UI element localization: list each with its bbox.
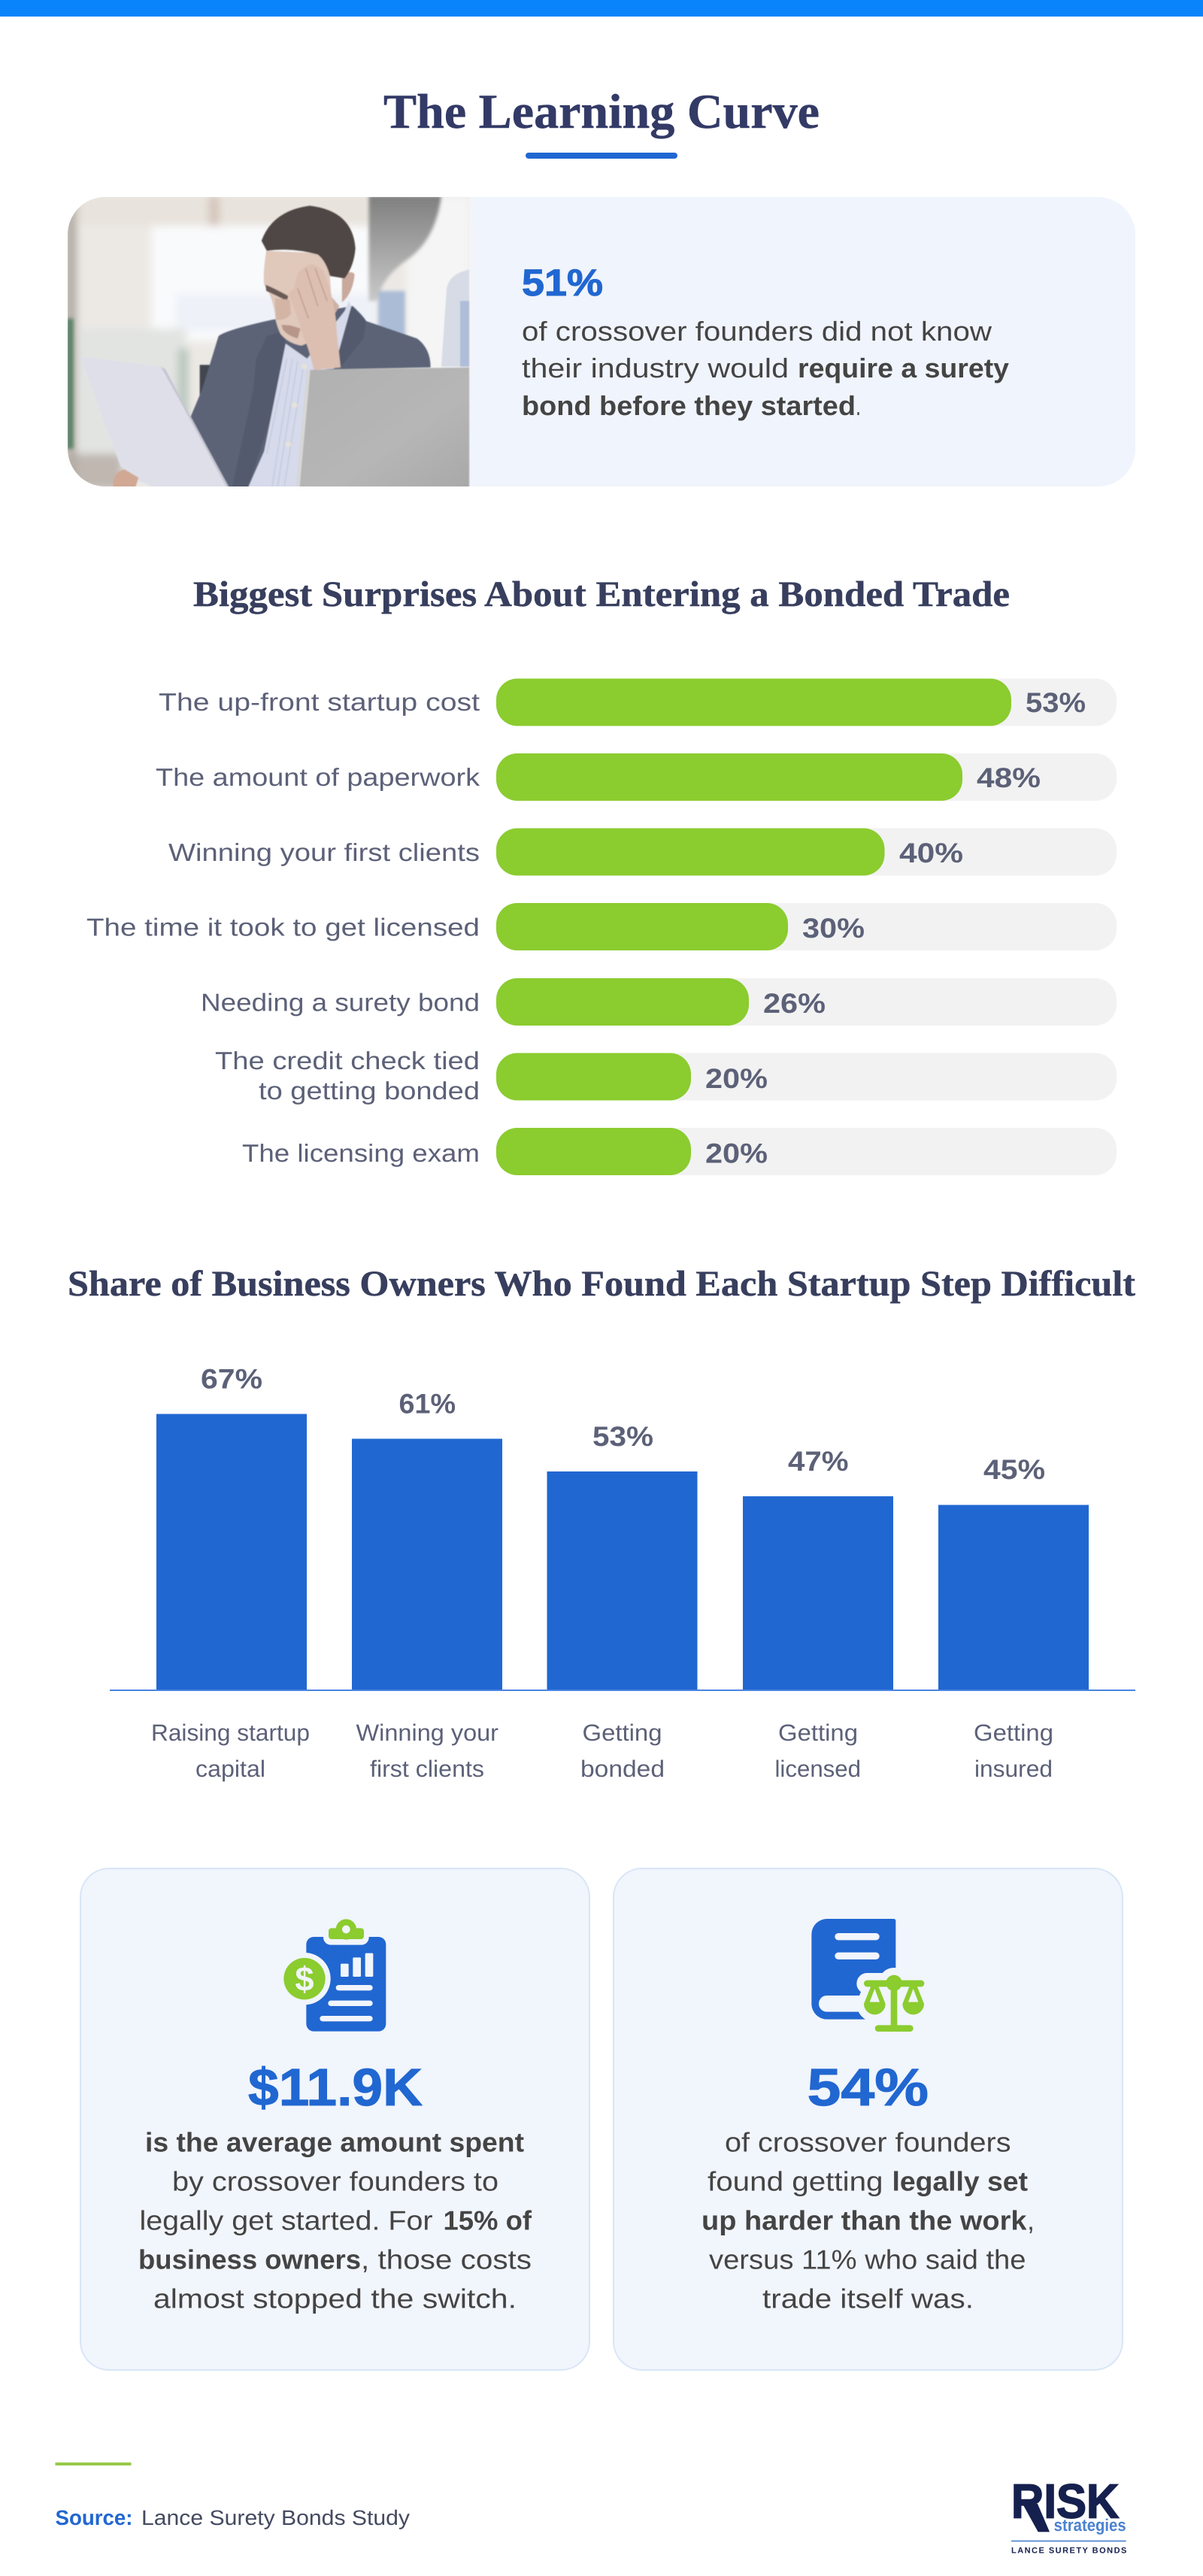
text: 54% description: found getting (708, 2165, 883, 2197)
text: $11.9K description (138, 2126, 532, 2314)
bar: needing a surety bond 26%: Needing a surety bond (201, 988, 480, 1017)
hand (288, 265, 341, 370)
bar: up-front startup cost 53%: The up-front startup cost (159, 688, 480, 716)
icon: clipboard with dollar coin (278, 1919, 386, 2032)
bar: amount of paperwork 48%: The amount of paperwork (156, 763, 480, 791)
stat: 51%: 51% (522, 262, 603, 304)
text: 51% description: require a surety (798, 353, 1009, 383)
text: $11.9K description: legally get started. For (140, 2205, 433, 2236)
column: getting bonded 53% (547, 1421, 698, 1782)
text: 54% description: up harder than the work (701, 2205, 1028, 2236)
axis line (110, 1690, 1135, 1691)
column: getting insured 45%: 45% (983, 1454, 1045, 1485)
column: getting bonded 53%: 53% (592, 1421, 653, 1452)
panel: 54% card (614, 1868, 1123, 2370)
bar: needing a surety bond 26% (201, 978, 1117, 1026)
shirt (248, 301, 351, 488)
heading: biggest surprises: Biggest Surprises About Entering a Bonded Trade (193, 574, 1010, 614)
logo: Risk Strategies Lance Surety Bonds: RISK (1011, 2474, 1119, 2528)
icon: clipboard with dollar coin: $ (295, 1959, 314, 1998)
bar: time to get licensed 30%: 30% (802, 913, 865, 944)
bar: licensing exam 20% (242, 1128, 1117, 1175)
text: 54% description: of crossover founders (725, 2126, 1011, 2158)
text: $11.9K description: almost stopped the switch. (153, 2283, 517, 2314)
column: raising startup capital 67%: Raising startup (151, 1720, 310, 1746)
column: getting licensed 47%: licensed (774, 1756, 861, 1782)
column: getting licensed 47%: 47% (788, 1446, 848, 1477)
photo: stressed businessman reading paperwork (60, 188, 471, 494)
source note (56, 2462, 410, 2529)
chart: startup step difficulty columns (110, 1364, 1135, 1782)
bar: up-front startup cost 53% (159, 678, 1117, 726)
bar: credit check 20%: The credit check tied (215, 1047, 480, 1074)
column: winning first clients 61%: 61% (398, 1388, 456, 1420)
paper (80, 356, 228, 488)
logo: Risk Strategies Lance Surety Bonds: strategies (1054, 2516, 1126, 2535)
text: 54% description (701, 2126, 1035, 2314)
panel: 51% stat (60, 188, 1135, 494)
neck (332, 298, 340, 314)
column: getting insured 45%: insured (974, 1756, 1053, 1782)
bar: credit check 20%: 20% (705, 1063, 768, 1094)
column: getting bonded 53%: bonded (580, 1756, 665, 1782)
bar: time to get licensed 30% (86, 903, 1117, 950)
brow shadow (265, 285, 288, 301)
column: getting bonded 53%: Getting (582, 1720, 662, 1746)
text: 54% description: trade itself was. (762, 2283, 974, 2314)
column: getting licensed 47%: Getting (778, 1720, 858, 1746)
text: $11.9K description: by crossover founders to (172, 2165, 498, 2197)
title: The Learning Curve (383, 85, 820, 139)
bar: winning first clients 40% (168, 829, 1117, 875)
bar: licensing exam 20%: 20% (705, 1138, 768, 1168)
bar: winning first clients 40%: 40% (899, 838, 963, 868)
column: winning first clients 61%: first clients (370, 1756, 484, 1782)
hair (262, 206, 356, 278)
source note: Lance Surety Bonds Study (141, 2506, 410, 2529)
heading: startup step difficulty: Share of Business Owners Who Found Each Startup Step Difficult (68, 1264, 1135, 1304)
column: winning first clients 61%: Winning your (356, 1720, 498, 1746)
bar: credit check 20% (215, 1047, 1117, 1105)
ear (342, 272, 355, 302)
bar: up-front startup cost 53%: 53% (1026, 687, 1086, 718)
text: 51% description (522, 316, 1009, 421)
text: 51% description: their industry would (522, 353, 789, 383)
column: winning first clients 61% (352, 1388, 502, 1782)
laptop (296, 368, 469, 488)
column: raising startup capital 67%: 67% (201, 1364, 262, 1394)
stat: 54%: 54% (808, 2058, 929, 2117)
text: 51% description: of crossover founders did not know (522, 316, 992, 347)
bar: time to get licensed 30%: The time it took to get licensed (86, 913, 480, 941)
text: 54% description: versus 11% who said the (709, 2244, 1026, 2275)
text: $11.9K description: , those costs (361, 2244, 532, 2275)
chart: biggest surprises horizontal bars (86, 678, 1117, 1175)
stat: $11.9K: $11.9K (248, 2058, 423, 2117)
column: raising startup capital 67% (151, 1364, 310, 1782)
text: $11.9K description: is the average amount spent (145, 2126, 524, 2158)
top bar (0, 0, 1203, 17)
panel: $11.9K card (80, 1868, 589, 2370)
bar: amount of paperwork 48%: 48% (977, 762, 1041, 793)
text: 54% description: legally set (892, 2165, 1028, 2197)
text: 54% description: , (1027, 2205, 1035, 2236)
icon: law book with scales (811, 1919, 924, 2032)
column: getting licensed 47% (743, 1446, 893, 1782)
face (264, 251, 332, 346)
column: getting insured 45%: Getting (974, 1720, 1053, 1746)
bar: needing a surety bond 26%: 26% (763, 988, 826, 1019)
text: $11.9K description: business owners (138, 2244, 361, 2275)
text: 51% description: bond before they started (522, 390, 856, 421)
column: getting insured 45% (938, 1454, 1089, 1782)
lower hand (114, 469, 138, 488)
text: $11.9K description: 15% of (444, 2205, 532, 2236)
logo: Risk Strategies Lance Surety Bonds: LANCE SURETY BONDS (1011, 2546, 1126, 2555)
column: raising startup capital 67%: capital (195, 1756, 265, 1782)
jacket (190, 306, 431, 488)
text: 51% description: . (856, 390, 861, 421)
logo: Risk Strategies Lance Surety Bonds (1011, 2474, 1126, 2555)
bar: credit check 20%: to getting bonded (259, 1077, 480, 1105)
source note: Source: (56, 2506, 132, 2529)
bar: licensing exam 20%: The licensing exam (242, 1139, 480, 1167)
bar: amount of paperwork 48% (156, 753, 1117, 801)
bar: winning first clients 40%: Winning your first clients (168, 838, 480, 866)
